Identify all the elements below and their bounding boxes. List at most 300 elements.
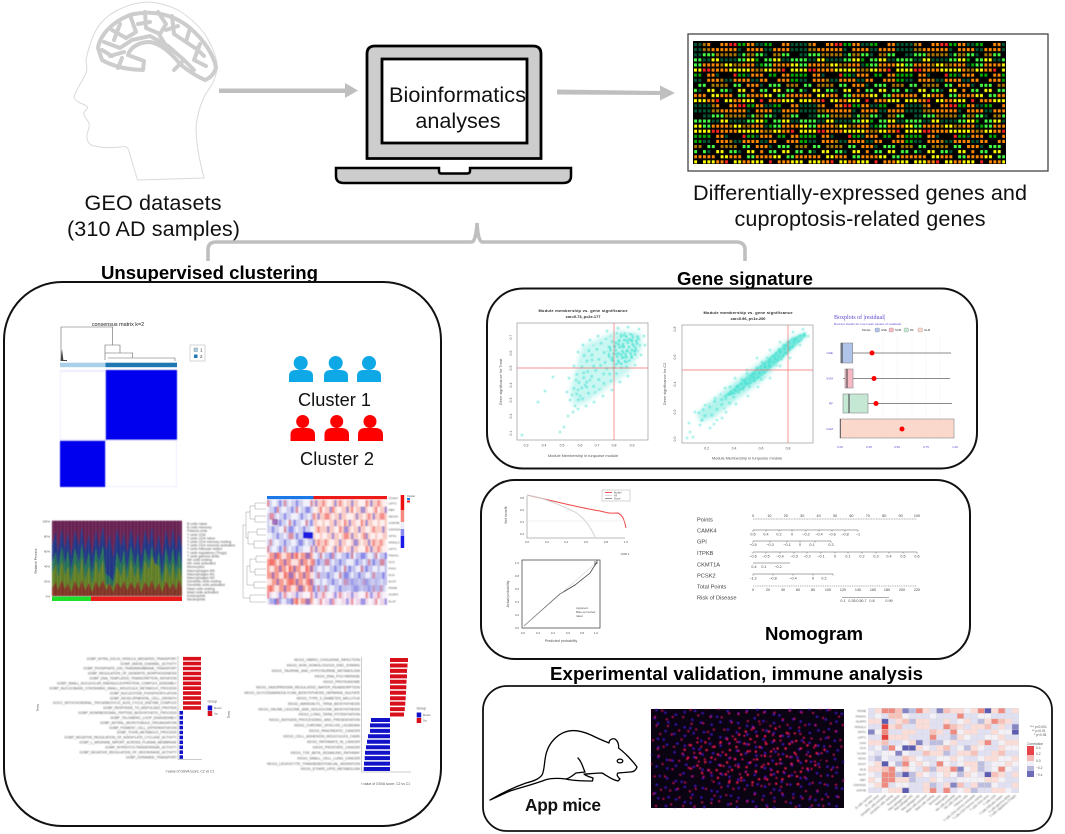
nomogram scales: 20 <box>766 588 770 592</box>
stacked bar chart: immune fractions: T cells gamma delta <box>187 554 219 558</box>
nomogram scales: −0.6 <box>828 532 836 536</box>
icons: cluster 2 people <box>290 415 383 441</box>
scatter plot: turquoise vs treat: 0.2 <box>509 414 513 418</box>
bar chart: KEGG GSVA: KEGG_CELL_ADHESION_MOLECULES_CAMS <box>283 734 361 738</box>
bar chart: KEGG GSVA: KEGG_SMALL_CELL_LUNG_CANCER <box>297 756 360 760</box>
stacked bar chart: immune fractions: Dendritic cells resting <box>187 580 221 584</box>
scatter plot: turquoise vs treat: 0.4 <box>542 444 546 448</box>
label: differentially-expressed genes: cuproptosis-related genes <box>734 206 986 231</box>
boxplots of residuals: GLM <box>826 427 833 431</box>
laptop inner display <box>382 59 527 143</box>
boxplots of residuals: Red dot stands for root mean square of residuals <box>834 322 902 326</box>
nomogram scales: ITPKB <box>697 551 714 557</box>
scatter plot: turquoise vs treat: Module membership vs. gene significance <box>538 308 628 313</box>
correlation heatmap: *** p<0.001 <box>1030 725 1047 729</box>
boxplots of residuals: SVM <box>826 376 833 380</box>
heading: unsupervised clustering: Unsupervised clustering <box>101 262 318 283</box>
nomogram scales: 70 <box>866 514 870 518</box>
calibration chart: 0.8 <box>580 631 584 635</box>
bar chart: KEGG GSVA: KEGG_TYPE_II_DIABETES_MELLITUS <box>297 696 361 700</box>
scatter plot: turquoise vs C2: Module Membership in turquoise module <box>712 456 782 460</box>
stacked bar chart: immune fractions: Macrophages M1 <box>187 572 215 576</box>
stacked bar chart: immune fractions: Plasma cells <box>187 529 207 533</box>
scatter plot: turquoise vs C2: 0.6 <box>759 446 763 450</box>
decision curve chart: 0.8 <box>604 540 608 544</box>
nomogram scales: 0 <box>752 514 754 518</box>
nomogram scales: −0.3 <box>766 543 774 547</box>
decision curve chart: 0.2 <box>520 532 524 536</box>
scatter plot: turquoise vs C2: 0.8 <box>673 327 677 331</box>
label: differentially-expressed genes: Differentially-expressed genes and <box>693 180 1027 205</box>
nomogram scales: −0.8 <box>841 532 849 536</box>
bar chart: GOBP GSVA: GOBP_NUCLEOBASE_CONTAINING_SMALL_MOLECULE_METABOLIC_PROCESS <box>49 686 177 690</box>
panel: unsupervised clustering <box>4 282 441 826</box>
label: Bioinformatics analyses: analyses <box>415 108 501 133</box>
bar chart: GOBP GSVA: Term <box>36 704 40 712</box>
nomogram scales: −0.1 <box>783 543 791 547</box>
heatmap: cluster gene expression: CDKN2A <box>388 528 401 532</box>
bar chart: GOBP GSVA: GOBP_NUCLEOTIDE_PHOSPHORYLATION <box>110 691 177 695</box>
laptop base <box>336 168 571 183</box>
bar chart: GOBP GSVA: GOBP_ASTRAL_MICROTUBULE_ORGANIZATION <box>100 721 177 725</box>
stacked bar chart: immune fractions: Relative Percent <box>34 549 38 573</box>
nomogram scales <box>697 514 920 603</box>
correlation heatmap: 0.0 <box>1036 759 1041 763</box>
bar chart: GOBP GSVA: GOBP_L_ARGININE_IMPORT_ACROSS_PLASMA_MEMBRANE <box>79 740 177 744</box>
heatmap: cluster gene expression: DLD <box>388 573 395 577</box>
stacked bar chart: immune fractions: NK cells resting <box>187 558 212 562</box>
correlation heatmap: 0.4 <box>1036 746 1041 750</box>
nomogram scales: 0.3 <box>873 554 879 558</box>
calibration chart: Apparent <box>576 606 588 610</box>
correlation heatmap: GCSH <box>857 751 866 755</box>
decision curve chart: 0.0 <box>525 540 529 544</box>
nomogram scales: Total Points <box>697 584 727 590</box>
bar chart: GOBP GSVA: GOMF_MYRISTOYLTRANSFERASE_ACTIVITY <box>105 746 177 750</box>
boxplots of residuals: GLM <box>924 328 931 332</box>
correlation heatmap: Mast cells activated <box>905 793 928 814</box>
stacked bar chart: immune fractions: 100% <box>42 520 50 524</box>
nomogram scales: −0.2 <box>774 565 782 569</box>
correlation heatmap: DLAT <box>858 773 866 777</box>
stacked bar chart: immune fractions: Macrophages M2 <box>187 576 215 580</box>
panel: gene signature <box>487 288 977 468</box>
nomogram scales: −0.6 <box>749 554 757 558</box>
nomogram scales: 0.5 <box>900 554 906 558</box>
calibration chart: 0.4 <box>551 631 555 635</box>
nomogram scales: CKMT1A <box>697 562 720 568</box>
correlation heatmap: PDHA1 <box>856 714 866 718</box>
stacked bar chart: immune fractions: 60% <box>44 550 50 554</box>
heatmap: cluster gene expression: PDHB <box>388 586 397 590</box>
nomogram scales: 40 <box>781 588 785 592</box>
correlation heatmap: DLD <box>860 767 867 771</box>
nomogram scales: 80 <box>882 514 886 518</box>
nomogram scales: 0.4 <box>751 565 757 569</box>
correlation heatmap: DBT <box>860 778 866 782</box>
label: App mice: App mice <box>525 795 601 815</box>
nomogram scales: 0.8 <box>869 599 875 603</box>
bar chart: GOBP GSVA: Down <box>214 706 222 710</box>
correlation heatmap: DLST <box>858 762 866 766</box>
scatter plot: turquoise vs treat: 0.9 <box>630 444 634 448</box>
boxplots of residuals: GSE <box>881 328 887 332</box>
bar chart: GOBP GSVA: GOBP_NEGATIVE_REGULATION_OF_ADENYLATE_CYCLASE_ACTIVITY <box>64 736 177 740</box>
consensus matrix chart: consensus matrix k=2 <box>92 322 144 328</box>
correlation heatmap: Neutrophils <box>934 793 949 807</box>
bar chart: GOBP GSVA: GOBP_REGULATION_OF_DENDRITE_MORPHOGENESIS <box>88 672 177 676</box>
decision curve chart: 0.6 <box>520 508 524 512</box>
scatter plot: turquoise vs C2: 0.2 <box>704 446 709 450</box>
consensus matrix chart <box>60 322 205 487</box>
nomogram scales: 0.7 <box>861 599 867 603</box>
heatmap: cluster gene expression: FDX1 <box>388 567 396 571</box>
icon: laptop <box>336 46 571 183</box>
scatter plot: turquoise vs treat: 0.6 <box>578 444 582 448</box>
nomogram scales: −0.5 <box>749 543 757 547</box>
decision curve chart: 1000:1 <box>620 552 630 556</box>
bar chart: KEGG GSVA: KEGG_PANCREATIC_CANCER <box>309 729 360 733</box>
nomogram scales: 60 <box>849 514 853 518</box>
label: differentially-expressed genes <box>693 180 1027 231</box>
heatmap: cluster gene expression: Cluster <box>388 496 398 500</box>
decision curve chart: 0.2 <box>545 540 549 544</box>
decision curve chart: 1.0 <box>624 540 628 544</box>
bar chart: KEGG GSVA: KEGG_TAURINE_AND_HYPOTAURINE_METABOLISM <box>272 669 360 673</box>
correlation heatmap: T cells follicular helper <box>978 794 1004 816</box>
scatter plot: turquoise vs treat: Module Membership in turquoise module <box>548 453 618 458</box>
bar chart: KEGG GSVA: KEGG_ETHER_LIPID_METABOLISM <box>301 767 360 771</box>
nomogram scales: 50 <box>833 514 837 518</box>
nomogram scales: 40 <box>817 514 821 518</box>
stacked bar chart: immune fractions: B cells memory <box>187 526 212 530</box>
bar chart: GOBP GSVA: GOBP_TOXIN_METABOLIC_PROCESS <box>117 731 177 735</box>
correlation heatmap: T cells gamma delta <box>988 793 1011 814</box>
decision curve chart: 0.8 <box>520 496 524 500</box>
nomogram scales: −0.2 <box>802 532 810 536</box>
bar chart: KEGG GSVA: KEGG_LONG_TERM_POTENTIATION <box>299 713 360 717</box>
decision curve chart: Net benefit <box>504 507 508 523</box>
correlation heatmap: T cells CD4 naive <box>969 793 990 812</box>
heatmap: cluster gene expression: GLS <box>388 560 395 564</box>
correlation heatmap: NK cells activated <box>935 793 956 812</box>
nomogram scales: −1 <box>856 532 860 536</box>
scatter plot: turquoise vs C2: 0.2 <box>673 410 677 414</box>
bar chart: KEGG GSVA: t value of GSVA score, C2 vs C1 <box>361 782 410 786</box>
calibration chart: 0.2 <box>515 613 519 617</box>
heatmap: cluster gene expression: CHIP3B <box>388 521 399 525</box>
nomogram scales: 0 <box>752 588 754 592</box>
decision curve chart: 0.4 <box>564 540 568 544</box>
decision curve chart: None <box>614 496 621 500</box>
nomogram scales: 0.2 <box>821 576 827 580</box>
heatmap: cluster gene expression: NLRP3 <box>388 593 399 597</box>
bar chart: KEGG GSVA: KEGG_CHRONIC_MYELOID_LEUKEMIA <box>294 724 361 728</box>
correlation heatmap: ** p<0.01 <box>1032 729 1046 733</box>
nomogram scales: 0.35 <box>848 599 856 603</box>
label: cluster 1: Cluster 1 <box>298 390 371 410</box>
nomogram scales: 90 <box>899 514 903 518</box>
bar chart: KEGG GSVA: Up <box>423 718 427 722</box>
bar chart: KEGG GSVA: KEGG_PROSTATE_CANCER <box>313 745 360 749</box>
calibration chart: 1.0 <box>594 631 598 635</box>
nomogram scales: 0.4 <box>763 532 769 536</box>
nomogram scales: 0 <box>799 543 801 547</box>
icon: human head with brain <box>74 2 217 180</box>
scatter plot: turquoise vs C2: 0.4 <box>673 382 677 386</box>
stacked bar chart: immune fractions: T cells CD4 memory resting <box>187 540 231 544</box>
boxplots of residuals: RF <box>829 402 833 406</box>
nomogram scales: 0.6 <box>750 532 756 536</box>
calibration chart: 0.8 <box>515 574 519 578</box>
correlation heatmap: Dendritic cells resting <box>869 793 894 815</box>
decision curve chart: 0.4 <box>520 520 524 524</box>
nomogram scales: −0.4 <box>789 576 797 580</box>
scatter plot: turquoise vs treat: cor=0.73, p=2e-177 <box>566 314 600 319</box>
stacked bar chart: immune fractions: Dendritic cells activated <box>187 583 225 587</box>
calibration chart: 0.4 <box>515 600 519 604</box>
nomogram scales: 0.4 <box>886 554 892 558</box>
heading: gene signature: Gene signature <box>677 268 813 289</box>
heatmap: cluster gene expression: MBT <box>388 508 395 512</box>
bar chart: KEGG GSVA: Term <box>227 711 231 719</box>
scatter plot: turquoise vs C2: 0.6 <box>673 355 677 359</box>
stacked bar chart: immune fractions: Eosinophils <box>187 594 206 598</box>
stacked bar chart: immune fractions: T cells CD4 memory activated <box>187 544 235 548</box>
label: nomogram: Nomogram <box>765 623 863 644</box>
correlation heatmap: T cells CD8 <box>982 793 997 807</box>
boxplots of residuals: 0.50 <box>894 445 900 449</box>
correlation heatmap: Macrophages M0 <box>887 793 908 812</box>
calibration chart: 0.0 <box>521 631 525 635</box>
nomogram scales: 60 <box>796 588 800 592</box>
nomogram scales: 0.1 <box>761 565 767 569</box>
calibration chart: Ideal <box>576 614 583 618</box>
bar chart: GOBP GSVA: GOBP_NONRIBOSOMAL_PEPTIDE_BIOSYNTHETIC_PROCESS <box>78 711 177 715</box>
scatter plot: turquoise vs treat: Gene significance for Treat <box>498 358 503 405</box>
consensus matrix chart: 2 <box>200 354 203 359</box>
nomogram scales: 80 <box>811 588 815 592</box>
label: cluster 2: Cluster 2 <box>300 449 374 469</box>
stacked bar chart: immune fractions: B cells naive <box>187 522 207 526</box>
scatter plot: turquoise vs treat: 0.6 <box>509 351 513 355</box>
boxplots of residuals: 0.25 <box>866 445 872 449</box>
correlation heatmap: Monocytes <box>928 793 942 806</box>
correlation heatmap: GLS <box>860 746 866 750</box>
calibration chart: 0.0 <box>515 626 519 630</box>
boxplots of residuals: GSE <box>826 351 833 355</box>
bar chart: GOBP GSVA: Up <box>214 712 218 716</box>
nomogram scales: −0.4 <box>815 532 823 536</box>
label: Bioinformatics analyses <box>389 82 526 133</box>
nomogram scales: −0.3 <box>790 554 798 558</box>
correlation heatmap: NFE2L2 <box>855 725 866 729</box>
correlation heatmap: Macrophages M1 <box>893 793 914 812</box>
bar chart: KEGG GSVA: KEGG_AMINOACYL_TRNA_BIOSYNTHESIS <box>288 702 361 706</box>
boxplots of residuals: 1.00 <box>952 445 958 449</box>
heatmap: cluster gene expression: DLAT <box>388 599 396 603</box>
bar chart: KEGG GSVA: Down <box>423 713 431 717</box>
bar chart: KEGG GSVA: KEGG_ANTIGEN_PROCESSING_AND_PRESENTATION <box>269 718 360 722</box>
bar chart: GOBP GSVA: GOBP_DEVELOPMENTAL_CELL_GROWTH <box>110 696 177 700</box>
brain <box>98 12 216 80</box>
bar chart: KEGG GSVA: KEGG_VALINE_LEUCINE_AND_ISOLEUCINE_BIOSYNTHESIS <box>258 707 361 711</box>
nomogram scales: −0.2 <box>803 554 811 558</box>
nomogram scales: GPI <box>697 540 707 546</box>
stacked bar chart: immune fractions: Macrophages M0 <box>187 569 215 573</box>
nomogram scales: 0 <box>812 576 814 580</box>
calibration chart: 0.2 <box>536 631 540 635</box>
scatter plot: turquoise vs C2: Module membership vs. gene significance <box>704 310 793 315</box>
stacked bar chart: immune fractions: 20% <box>44 580 50 584</box>
heatmap: cluster gene expression: LIPT2 <box>388 502 397 506</box>
nomogram scales: 0.1 <box>840 599 846 603</box>
correlation heatmap: −0.2 <box>1036 766 1043 770</box>
boxplots of residuals: 0.00 <box>837 445 843 449</box>
boxplots of residuals: RF <box>910 328 914 332</box>
decision curve chart: 0.6 <box>584 540 588 544</box>
decision curve chart <box>504 490 630 556</box>
boxplots of residuals: Boxplots of |residual| <box>834 314 885 321</box>
correlation heatmap: FDX1 <box>858 757 866 761</box>
bar chart: GOBP GSVA: GOBP_RESPONSE_TO_MISFOLDED_PROTEIN <box>103 706 177 710</box>
correlation heatmap: PDHB <box>857 709 866 713</box>
heatmap: cluster gene expression: PDHA1 <box>388 554 399 558</box>
nomogram scales: 30 <box>800 514 804 518</box>
nomogram scales: PCSK2 <box>697 574 716 580</box>
boxplots of residuals: SVM <box>895 328 902 332</box>
bar chart: GOBP GSVA: GOBP_NEGATIVE_REGULATION_OF_HEXOKINASE_ACTIVITY <box>80 750 177 754</box>
stacked bar chart: immune fractions: T cells follicular helper <box>187 547 223 551</box>
head outline <box>74 2 217 180</box>
bar chart: GOBP GSVA: GOBP_PHOSPHATE_ION_TRANSMEMBRANE_TRANSPORT <box>83 667 177 671</box>
bar chart: GOBP GSVA <box>36 656 222 774</box>
bar chart: GOBP GSVA: t value of GSVA score, C2 vs C1 <box>166 770 214 774</box>
bar chart: GOBP GSVA: GOCC_MITOCHONDRIAL_TRICARBOXYLIC_ACID_CYCLE_ENZYME_COMPLEX <box>53 701 177 705</box>
scatter plot: turquoise vs treat: 0.5 <box>560 444 564 448</box>
correlation heatmap: B cells naive <box>864 793 880 808</box>
correlation heatmap: MTF1 <box>858 730 866 734</box>
bar chart: KEGG GSVA: KEGG_TGF_BETA_SIGNALING_PATHWAY <box>291 751 361 755</box>
heatmap: cluster gene expression: SEC63 <box>388 514 398 518</box>
calibration chart: 0.6 <box>515 587 519 591</box>
immunofluorescence image <box>651 709 844 808</box>
nomogram scales: −1.2 <box>749 576 757 580</box>
scatter plot: turquoise vs treat <box>498 308 648 458</box>
scatter plot: turquoise vs C2: 0.4 <box>732 446 736 450</box>
icon: App mouse <box>490 731 637 800</box>
heatmap: cluster gene expression: NFE2L2 <box>388 541 400 545</box>
nomogram scales: 140 <box>855 588 861 592</box>
label: GEO datasets: GEO datasets <box>84 190 222 215</box>
scatter plot: turquoise vs treat: 0.3 <box>524 444 528 448</box>
label: GEO datasets <box>67 190 240 241</box>
correlation heatmap: 0.2 <box>1036 752 1041 756</box>
heading: experimental validation: Experimental validation, immune analysis <box>550 663 923 684</box>
scatter plot: turquoise vs treat: 0.5 <box>509 366 513 370</box>
correlation heatmap: NLRP3 <box>856 720 866 724</box>
nomogram scales: CAMK4 <box>697 528 717 534</box>
stacked bar chart: immune fractions: 40% <box>44 564 50 568</box>
decision curve chart: Model <box>614 490 622 494</box>
scatter plot: turquoise vs treat: 0.8 <box>612 444 616 448</box>
nomogram scales: 0.1 <box>845 554 851 558</box>
stacked bar chart: immune fractions: Neutrophils <box>187 598 205 602</box>
scatter plot: turquoise vs treat: 0.4 <box>509 383 513 387</box>
calibration chart <box>506 560 600 643</box>
nomogram scales: 160 <box>870 588 876 592</box>
nomogram scales: 100 <box>825 588 831 592</box>
correlation heatmap: ATP7B <box>856 788 866 792</box>
correlation heatmap: Dendritic cells activated <box>860 793 887 817</box>
nomogram scales: Points <box>697 518 713 524</box>
label: GEO datasets: (310 AD samples) <box>67 216 240 241</box>
bar chart: KEGG GSVA: Group <box>416 706 426 710</box>
correlation heatmap: T cells CD4 memory activated <box>942 793 976 822</box>
stacked bar chart: immune fractions: T cells CD4 naive <box>187 536 215 540</box>
nomogram scales: 0.1 <box>809 543 815 547</box>
bracket connector <box>208 223 745 261</box>
bar chart: KEGG GSVA: KEGG_GLYCOSAMINOGLYCAN_BIOSYNTHESIS_HEPARAN_SULFATE <box>244 691 361 695</box>
nomogram scales: 0.2 <box>859 554 865 558</box>
microarray dots <box>693 41 1006 164</box>
correlation heatmap: LIPT1 <box>858 736 866 740</box>
calibration chart: 0.6 <box>566 631 570 635</box>
scatter plot: turquoise vs C2: 0.0 <box>673 437 677 441</box>
stacked bar chart: immune fractions: 0% <box>46 594 50 598</box>
stacked bar chart: immune fractions: 80% <box>44 534 50 538</box>
scatter plot: turquoise vs treat: 0.7 <box>595 444 599 448</box>
bar chart: GOBP GSVA: Group <box>208 700 217 704</box>
correlation heatmap: Macrophages M2 <box>900 793 921 812</box>
panel: nomogram <box>481 480 970 659</box>
scatter plot: turquoise vs C2 <box>662 310 813 460</box>
bar chart: GOBP GSVA: GOBP_PIGMENT_CELL_DIFFERENTIATION <box>109 726 177 730</box>
nomogram scales: 200 <box>899 588 905 592</box>
decision curve chart: All <box>614 494 617 498</box>
stacked bar chart: immune fractions: T cells regulatory (Tregs) <box>187 551 227 555</box>
calibration chart: Bias-corrected <box>576 610 596 614</box>
calibration chart: Predicted probability <box>545 639 577 643</box>
bar chart: GOBP GSVA: GOBP_DNA_TEMPLATED_TRANSCRIPTION_INITIATION <box>89 677 177 681</box>
nomogram scales: −0.8 <box>769 576 777 580</box>
icons: cluster 1 people <box>289 356 381 382</box>
stacked bar chart: immune fractions: Mast cells resting <box>187 587 215 591</box>
nomogram scales: 0.2 <box>776 532 782 536</box>
nomogram scales: 10 <box>767 514 771 518</box>
heatmap: cluster gene expression: LIPT1 <box>388 547 397 551</box>
nomogram scales: 0.5 <box>856 599 862 603</box>
correlation heatmap: B cells memory <box>854 793 873 810</box>
bar chart: KEGG GSVA <box>227 657 431 786</box>
arrow: laptop to microarray <box>557 86 675 100</box>
correlation heatmap: Correlation <box>1027 742 1043 746</box>
nomogram scales: 100 <box>914 514 920 518</box>
calibration chart: Actual probability <box>506 580 510 607</box>
scatter plot: turquoise vs C2: cor=0.96, p<1e-200 <box>731 316 765 321</box>
bar chart: KEGG GSVA: KEGG_VASOPRESSIN_REGULATED_WATER_REABSORPTION <box>256 686 360 690</box>
consensus matrix chart: 1 <box>200 348 203 352</box>
correlation heatmap: * p<0.05 <box>1034 733 1047 737</box>
bar chart: GOBP GSVA: GOBP_SMALL_NUCLEOLAR_RIBONUCLEOPROTEIN_COMPLEX_ASSEMBLY <box>57 682 177 686</box>
nomogram scales: 0 <box>791 532 793 536</box>
scatter plot: turquoise vs treat: 0.3 <box>509 398 513 402</box>
correlation heatmap: T cells regulatory (Tregs) <box>989 794 1017 818</box>
bar chart: GOBP GSVA: GOBP_INTRA_GOLGI_VESICLE_MEDIATED_TRANSPORT <box>87 657 177 661</box>
stacked bar chart: immune fractions <box>34 520 235 602</box>
calibration chart: 1.0 <box>515 561 519 565</box>
bar chart: KEGG GSVA: KEGG_PROTEASOME <box>323 680 361 684</box>
